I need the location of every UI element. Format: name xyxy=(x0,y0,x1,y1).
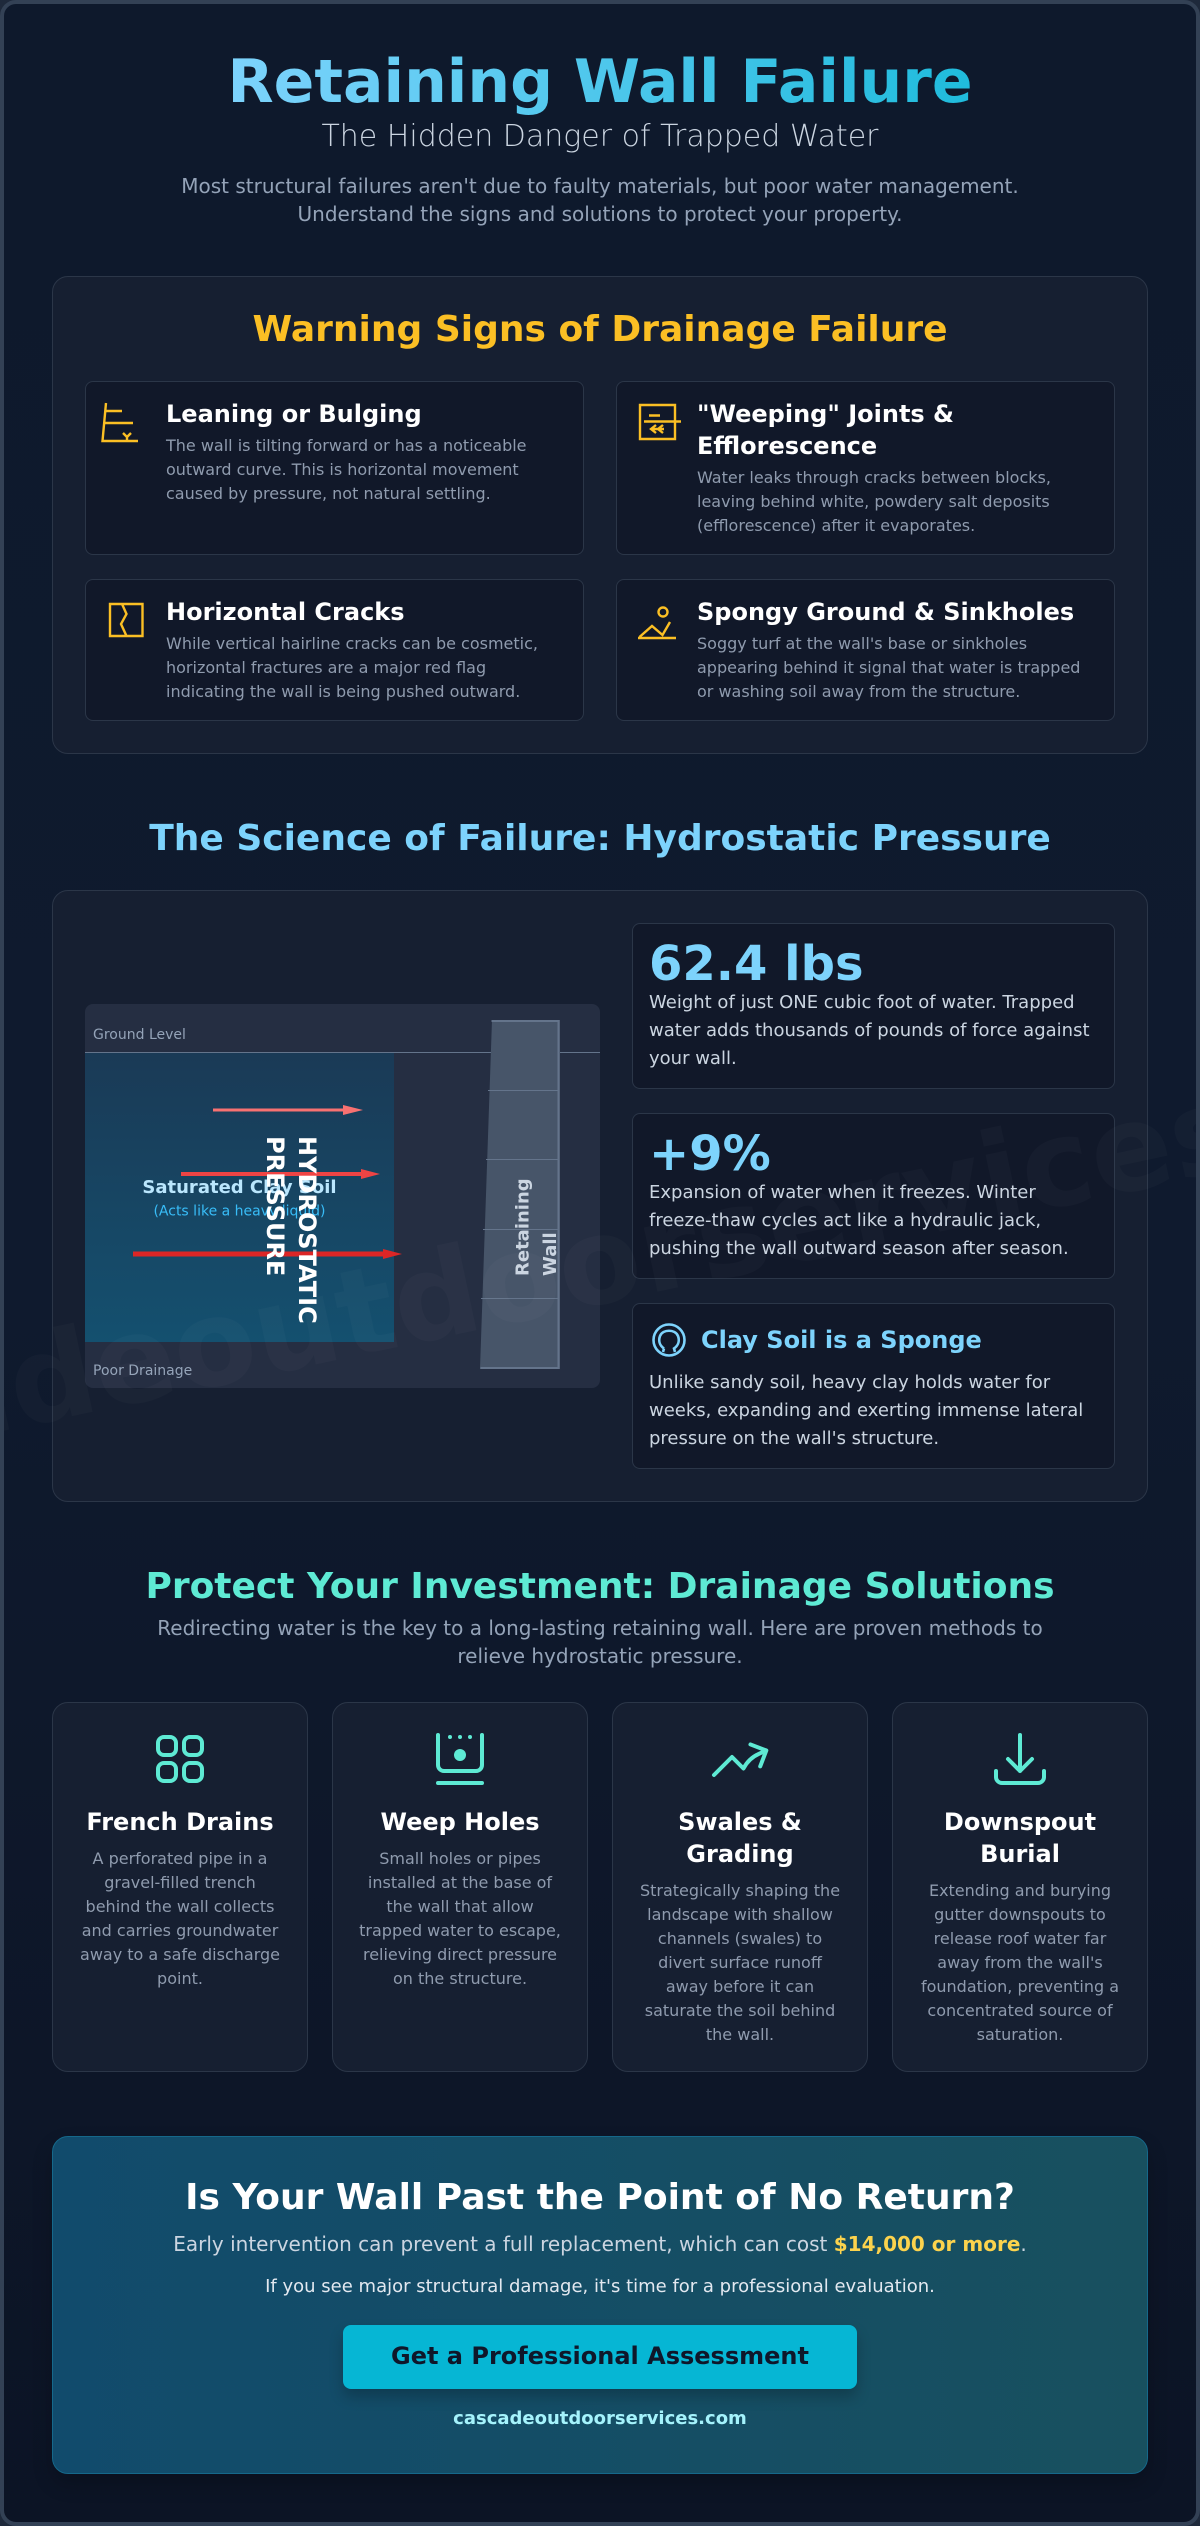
subtitle: The Hidden Danger of Trapped Water xyxy=(321,119,879,154)
solution card: swales and grading xyxy=(612,1702,868,2072)
diagram: hydrostatic pressure on wall: Poor Drainage xyxy=(93,1363,192,1379)
panel: hydrostatic pressure xyxy=(52,890,1148,1502)
stat: +9%: +9% xyxy=(649,1126,771,1182)
text: leaning or bulging description: caused by pressure, not natural settling. xyxy=(166,484,491,503)
diagram: hydrostatic pressure on wall: Ground Level xyxy=(93,1027,186,1043)
text: weep holes description: installed at the base of xyxy=(368,1873,552,1892)
text: downspout title xyxy=(944,1808,1096,1868)
text: professional evaluation: If you see major structural damage, it's time for a professional evaluation. xyxy=(265,2276,935,2297)
text: weeping joints title: Efflorescence xyxy=(697,432,877,460)
heading: call to action: Is Your Wall Past the Point of No Return? xyxy=(185,2177,1015,2218)
text: leaning or bulging description: outward curve. This is horizontal movement xyxy=(166,460,519,479)
icon: swales xyxy=(712,1742,768,1778)
text: horizontal cracks description: horizontal fractures are a major red flag xyxy=(166,658,486,677)
solution card: french drains xyxy=(52,1702,308,2072)
text: weeping joints description: Water leaks through cracks between blocks, xyxy=(697,468,1051,487)
solution card: downspout burial xyxy=(892,1702,1148,2072)
text: downspout description: foundation, preventing a xyxy=(921,1977,1119,1996)
heading: drainage solutions: Protect Your Investment: Drainage Solutions xyxy=(145,1566,1055,1607)
text: weep holes description: on the structure. xyxy=(393,1969,527,1988)
diagram: hydrostatic pressure on wall: HYDROSTATIC xyxy=(293,1136,321,1324)
text: french drains description: point. xyxy=(157,1969,203,1988)
text: weep holes description: Small holes or pipes xyxy=(379,1849,541,1868)
text: weep holes description: the wall that allow xyxy=(386,1897,534,1916)
text: water weight description: your wall. xyxy=(649,1048,737,1069)
text: leaning or bulging description: The wall is tilting forward or has a noticeable xyxy=(166,436,527,455)
text: horizontal cracks description: indicating the wall is being pushed outward. xyxy=(166,682,520,701)
text: weeping joints title xyxy=(697,400,954,460)
text: downspout description: saturation. xyxy=(977,2025,1063,2044)
icon: french drains xyxy=(156,1735,204,1783)
text: weeping joints description: leaving behind white, powdery salt deposits xyxy=(697,492,1050,511)
text: downspout description: release roof water far xyxy=(934,1929,1106,1948)
text: swales description xyxy=(640,1881,840,2044)
text: french drains description: A perforated pipe in a xyxy=(93,1849,267,1868)
panel: call to action xyxy=(52,2136,1148,2474)
text: freeze expansion description xyxy=(649,1182,1069,1259)
text: weep holes description: relieving direct pressure xyxy=(363,1945,557,1964)
text: swales title xyxy=(678,1808,802,1868)
icon: weeping joint xyxy=(638,404,681,440)
icon: leaning wall xyxy=(101,402,138,442)
diagram: hydrostatic pressure on wall: Saturated Clay Soil xyxy=(142,1177,337,1198)
icon: cracked wall xyxy=(108,602,144,638)
diagram: hydrostatic pressure on wall: (Acts like a heavy liquid) xyxy=(153,1204,326,1220)
text: french drains description: away to a safe discharge xyxy=(80,1945,280,1964)
text: clay soil description: pressure on the wall's structure. xyxy=(649,1428,939,1449)
text: freeze expansion description: freeze-thaw cycles act like a hydraulic jack, xyxy=(649,1210,1041,1231)
text: leaning or bulging title: Leaning or Bulging xyxy=(166,400,422,428)
button: get a professional assessment xyxy=(343,2325,857,2389)
icon: weep holes xyxy=(436,1733,484,1785)
text: weep holes description: trapped water to escape, xyxy=(359,1921,561,1940)
text: water weight description xyxy=(649,992,1090,1069)
text: swales description: divert surface runoff xyxy=(658,1953,822,1972)
card: leaning or bulging xyxy=(85,381,584,555)
text: swales description: saturate the soil behind xyxy=(645,2001,835,2020)
text: leaning or bulging description xyxy=(166,436,527,503)
text: spongy ground description: Soggy turf at the wall's base or sinkholes xyxy=(697,634,1027,653)
text: freeze expansion description: Expansion of water when it freezes. Winter xyxy=(649,1182,1036,1203)
diagram: hydrostatic pressure on wall: Wall xyxy=(540,1232,561,1276)
panel: warning signs xyxy=(52,276,1148,754)
text: downspout title: Downspout xyxy=(944,1808,1096,1836)
text: swales description: Strategically shaping the xyxy=(640,1881,840,1900)
diagram: hydrostatic pressure on wall xyxy=(85,1004,600,1388)
card: clay soil xyxy=(632,1303,1115,1469)
text: downspout description: gutter downspouts to xyxy=(934,1905,1106,1924)
text: swales description: channels (swales) to xyxy=(658,1929,822,1948)
diagram: hydrostatic pressure on wall: Retaining xyxy=(512,1178,534,1276)
text: spongy ground title: Spongy Ground & Sinkholes xyxy=(697,598,1074,626)
text: weep holes description xyxy=(359,1849,561,1988)
text: solutions intro xyxy=(157,1616,1043,1668)
heading: science of failure: The Science of Failure: Hydrostatic Pressure xyxy=(149,818,1051,859)
text: french drains description: and carries groundwater xyxy=(82,1921,278,1940)
text: swales title: Grading xyxy=(686,1840,794,1868)
icon: sinkhole xyxy=(638,606,676,640)
text: downspout description: away from the wall's xyxy=(937,1953,1103,1972)
text: weeping joints title: "Weeping" Joints & xyxy=(697,400,954,428)
text: downspout description xyxy=(921,1881,1119,2044)
text: french drains description: gravel-filled trench xyxy=(104,1873,256,1892)
solution card: weep holes xyxy=(332,1702,588,2072)
stat card: freeze expansion xyxy=(632,1113,1115,1279)
text: downspout title: Burial xyxy=(980,1840,1060,1868)
text: website: cascadeoutdoorservices.com xyxy=(453,2408,747,2429)
intro text: Understand the signs and solutions to protect your property. xyxy=(298,202,902,226)
text: french drains description: behind the wall collects xyxy=(86,1897,274,1916)
stat: 62.4 lbs: 62.4 lbs xyxy=(649,936,864,992)
diagram: hydrostatic pressure on wall: PRESSURE xyxy=(261,1136,289,1276)
heading: warning signs: Warning Signs of Drainage Failure xyxy=(252,309,948,350)
text: swales description: the wall. xyxy=(706,2025,774,2044)
text: swales title: Swales & xyxy=(678,1808,802,1836)
text: swales description: away before it can xyxy=(666,1977,814,1996)
text: freeze expansion description: pushing the wall outward season after season. xyxy=(649,1238,1069,1259)
text: horizontal cracks description: While vertical hairline cracks can be cosmetic, xyxy=(166,634,538,653)
text: solutions intro: Redirecting water is the key to a long-lasting retaining wall. Here are proven methods to xyxy=(157,1616,1043,1640)
text: solutions intro: relieve hydrostatic pressure. xyxy=(457,1644,743,1668)
button: get a professional assessment: Get a Professional Assessment xyxy=(391,2342,809,2370)
text: horizontal cracks description xyxy=(166,634,538,701)
text: swales description: landscape with shallow xyxy=(647,1905,833,1924)
card: weeping joints xyxy=(616,381,1115,555)
text: clay soil description: Unlike sandy soil, heavy clay holds water for xyxy=(649,1372,1050,1393)
text: water weight description: water adds thousands of pounds of force against xyxy=(649,1020,1090,1041)
text: spongy ground description xyxy=(697,634,1080,701)
text: clay soil description: weeks, expanding and exerting immense lateral xyxy=(649,1400,1083,1421)
text: spongy ground description: or washing soil away from the structure. xyxy=(697,682,1020,701)
text: water weight description: Weight of just ONE cubic foot of water. Trapped xyxy=(649,992,1075,1013)
text: replacement cost: Early intervention can prevent a full replacement, which can cost $14,000 or more. xyxy=(173,2232,1027,2256)
intro text xyxy=(181,174,1019,226)
text: weeping joints description xyxy=(697,468,1051,535)
stat card: water weight xyxy=(632,923,1115,1089)
text: weep holes title: Weep Holes xyxy=(380,1808,540,1836)
text: weeping joints description: (efflorescence) after it evaporates. xyxy=(697,516,975,535)
text: horizontal cracks title: Horizontal Cracks xyxy=(166,598,405,626)
text: downspout description: Extending and burying xyxy=(929,1881,1111,1900)
intro text: Most structural failures aren't due to faulty materials, but poor water management. xyxy=(181,174,1019,198)
text: clay soil title: Clay Soil is a Sponge xyxy=(701,1326,982,1354)
icon: sponge xyxy=(652,1323,686,1357)
text: french drains description xyxy=(80,1849,280,1988)
card: spongy ground xyxy=(616,579,1115,721)
title: Retaining Wall Failure xyxy=(227,47,973,117)
icon: downspout xyxy=(994,1733,1046,1785)
text: downspout description: concentrated source of xyxy=(927,2001,1113,2020)
card: horizontal cracks xyxy=(85,579,584,721)
text: clay soil description xyxy=(649,1372,1083,1449)
text: french drains title: French Drains xyxy=(86,1808,274,1836)
text: spongy ground description: appearing behind it signal that water is trapped xyxy=(697,658,1080,677)
